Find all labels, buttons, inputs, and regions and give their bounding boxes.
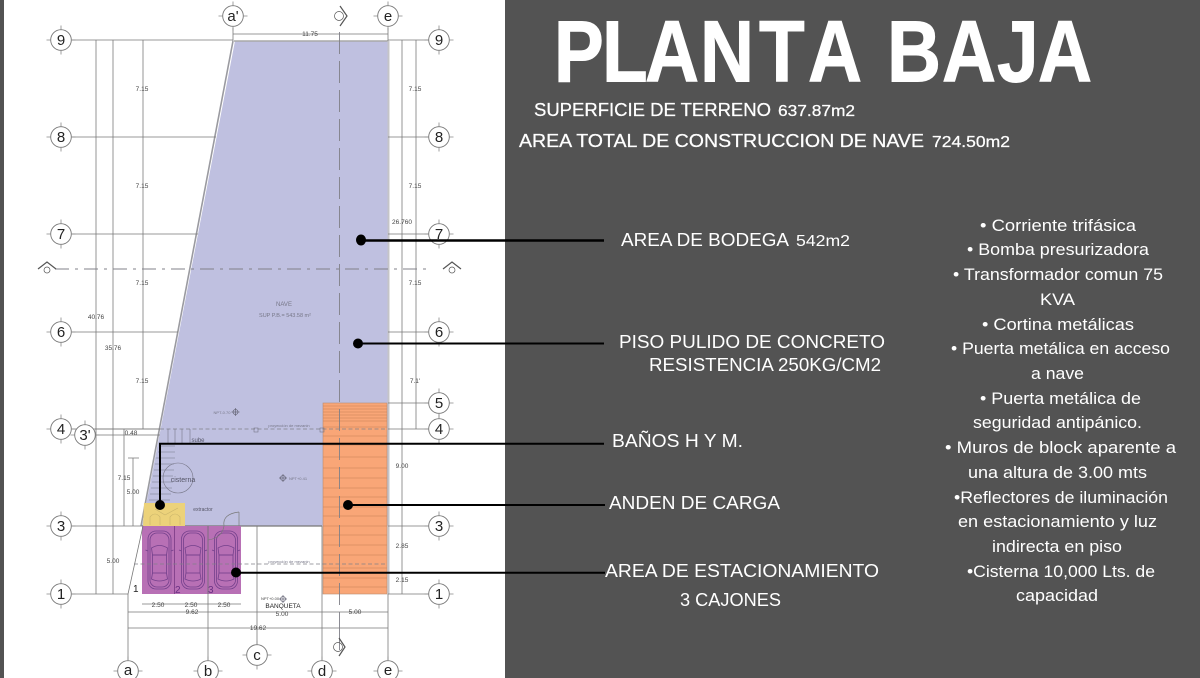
grid bubble markers: 4 [435,421,443,438]
dimension labels: 26.760 [392,219,412,226]
dimension labels: 7.1' [410,378,420,385]
text block: feature list: • Corriente trifásica [980,216,1137,235]
dimension labels: 40.76 [88,314,105,321]
dimension labels: 5.00 [127,489,140,496]
grid bubble markers: 5 [435,395,443,412]
grid bubble markers: 3 [435,518,443,535]
loading dock ramp [323,403,387,594]
bathrooms [143,503,185,527]
text block: feature list [945,216,1177,605]
dimension labels: 9.62 [186,609,199,616]
subtitle: superficie de terreno: 637.87m2 [778,103,855,120]
grid bubble markers: 8 [57,129,65,146]
callout: piso pulido leader [353,338,604,348]
text block: feature list: indirecta en piso [992,537,1122,556]
dimension labels: 2.15 [396,577,409,584]
subtitle: area total de construccion: 724.50m2 [932,134,1010,151]
text block: feature list: una altura de 3.00 mts [968,463,1147,482]
level markers [232,408,287,603]
nave wall outline [141,41,388,594]
grid bubble markers: 4 [57,421,65,438]
label: anden de carga: ANDEN DE CARGA [609,493,780,513]
dimension labels: 5.00 [107,558,120,565]
dimension labels: proyección de mezanin [268,423,310,428]
grid bubble markers: 3' [79,427,91,444]
callout: area de bodega leader [356,234,604,246]
grid bubble markers: 1 [57,586,65,603]
dimension labels: 0.48 [125,430,138,437]
label: piso pulido de concreto: PISO PULIDO DE CONCRETO [619,332,885,352]
dimension labels: SUP P.B.= 543.58 m² [259,313,311,319]
dimension labels: proyección de mezanin [268,559,310,564]
icon: car 1 [146,531,174,589]
dimension labels: 5.00 [349,609,362,616]
panel: floor plan [4,0,505,678]
text block: feature list: •Cisterna 10,000 Lts. de [967,562,1155,581]
grid bubble markers: 7 [435,226,443,243]
dimension labels: extractor [193,507,213,513]
label: area de estacionamiento [605,561,879,610]
grid bubble markers: c [253,647,261,664]
dimension labels: 7.15 [118,475,131,482]
text block: feature list: • Puerta metálica de [980,389,1141,408]
dimension labels: 35.76 [105,345,122,352]
icon: car 3 [212,531,240,589]
grid bubble markers [46,2,454,678]
parking numbers [133,584,214,596]
grid bubble markers: 9 [57,32,65,49]
text block: feature list: • Puerta metálica en acceso [951,339,1170,358]
dimension labels: 7.15 [409,280,422,287]
label: banos: BAÑOS H Y M. [612,430,743,451]
label: area de bodega: 542m2 [796,233,850,250]
section markers [38,6,461,656]
subtitle: area total de construccion: AREA TOTAL DE CONSTRUCCION DE NAVE [519,131,924,151]
label: area de estacionamiento: AREA DE ESTACIONAMIENTO [605,561,879,581]
text block: feature list: KVA [1040,290,1076,309]
icon: car 2 [179,531,207,589]
dimension labels: 2.85 [396,543,409,550]
stairs and cistern [149,428,324,500]
label: piso pulido de concreto: RESISTENCIA 250KG/CM2 [649,355,881,375]
grid bubble markers: a' [227,8,239,25]
callout: estacionamiento leader [231,568,605,578]
label: area de bodega: AREA DE BODEGA [621,230,789,250]
grid bubble markers: 6 [435,324,443,341]
subtitle: superficie de terreno: SUPERFICIE DE TERRENO [534,100,771,120]
grid bubble markers: 8 [435,129,443,146]
parking numbers: 3 [208,585,214,596]
dimension labels: 2.50 [152,602,165,609]
grid bubble markers: 1 [435,586,443,603]
text block: feature list: • Bomba presurizadora [967,240,1150,259]
section lines [55,32,430,650]
parking numbers: 2 [175,585,181,596]
dimension labels: 7.15 [409,183,422,190]
text block: feature list: a nave [1031,364,1084,383]
dimension labels: 7.15 [136,183,149,190]
dimension labels: 2.50 [218,602,231,609]
callout: banos leader [155,444,604,510]
dimension labels [88,31,422,632]
grid bubble markers: 9 [435,32,443,49]
dimension labels: 9.00 [396,463,409,470]
dimension labels: 7.15 [136,86,149,93]
dimension labels: 11.75 [302,31,318,38]
grid and dimension lines [72,28,429,660]
dimension labels: 5.00 [276,611,289,618]
parking numbers: 1 [133,584,139,595]
dimension labels: BANQUETA [265,603,301,610]
dimension labels: NPT-0.70 [214,410,231,415]
dimension labels: NPT+0.00 [261,596,280,601]
title: PLANTA BAJA [554,4,1092,101]
dimension labels: 7.15 [409,86,422,93]
dimension labels: NAVE [276,302,292,308]
dimension labels: 19.62 [250,625,267,632]
grid bubble markers: 7 [57,226,65,243]
label: area de estacionamiento: 3 CAJONES [680,590,781,610]
parking area [133,526,241,596]
text block: feature list: en estacionamiento y luz [958,512,1157,531]
text block: feature list: • Muros de block aparente a [945,438,1177,457]
text block: feature list: •Reflectores de iluminación [954,488,1168,507]
dimension labels: 7.15 [136,280,149,287]
dimension labels: NPT+0.41 [289,476,308,481]
grid bubble markers: 6 [57,324,65,341]
text block: feature list: capacidad [1016,586,1098,605]
label: piso pulido de concreto [619,332,885,375]
text block: feature list: • Transformador comun 75 [953,265,1163,284]
text block: feature list: • Cortina metálicas [982,315,1134,334]
text block: feature list: seguridad antipánico. [973,413,1142,432]
dimension labels: sube [191,438,205,444]
callout: anden leader [343,500,605,510]
grid bubble markers: e [384,8,392,25]
dimension labels: cisterna [171,477,195,484]
dimension labels: 7.15 [136,378,149,385]
dimension labels: 2.50 [185,602,198,609]
grid bubble markers: 3 [57,518,65,535]
label: area de bodega [621,230,850,250]
nave floor area [142,41,388,526]
